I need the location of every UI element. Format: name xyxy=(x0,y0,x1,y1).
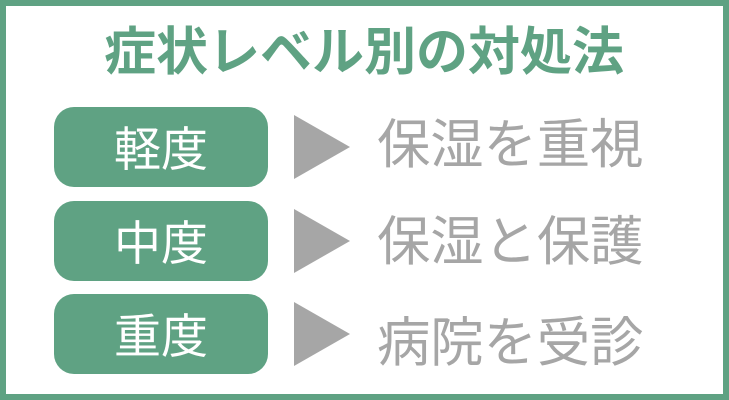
title: 症状レベル別の対処法 xyxy=(104,24,624,82)
level label: mild: 軽度 xyxy=(114,123,208,176)
action: severe: 病院を受診 xyxy=(377,314,643,373)
level label: mild xyxy=(54,107,268,187)
arrow: moderate xyxy=(294,209,350,273)
level label: moderate: 中度 xyxy=(114,217,208,270)
action: mild: 保湿を重視 xyxy=(377,116,643,175)
arrow: mild xyxy=(294,115,350,179)
arrow: severe xyxy=(294,302,350,366)
level label: moderate xyxy=(54,201,268,281)
level label: severe xyxy=(54,294,268,374)
level label: severe: 重度 xyxy=(114,310,208,363)
action: moderate: 保湿と保護 xyxy=(377,213,643,272)
